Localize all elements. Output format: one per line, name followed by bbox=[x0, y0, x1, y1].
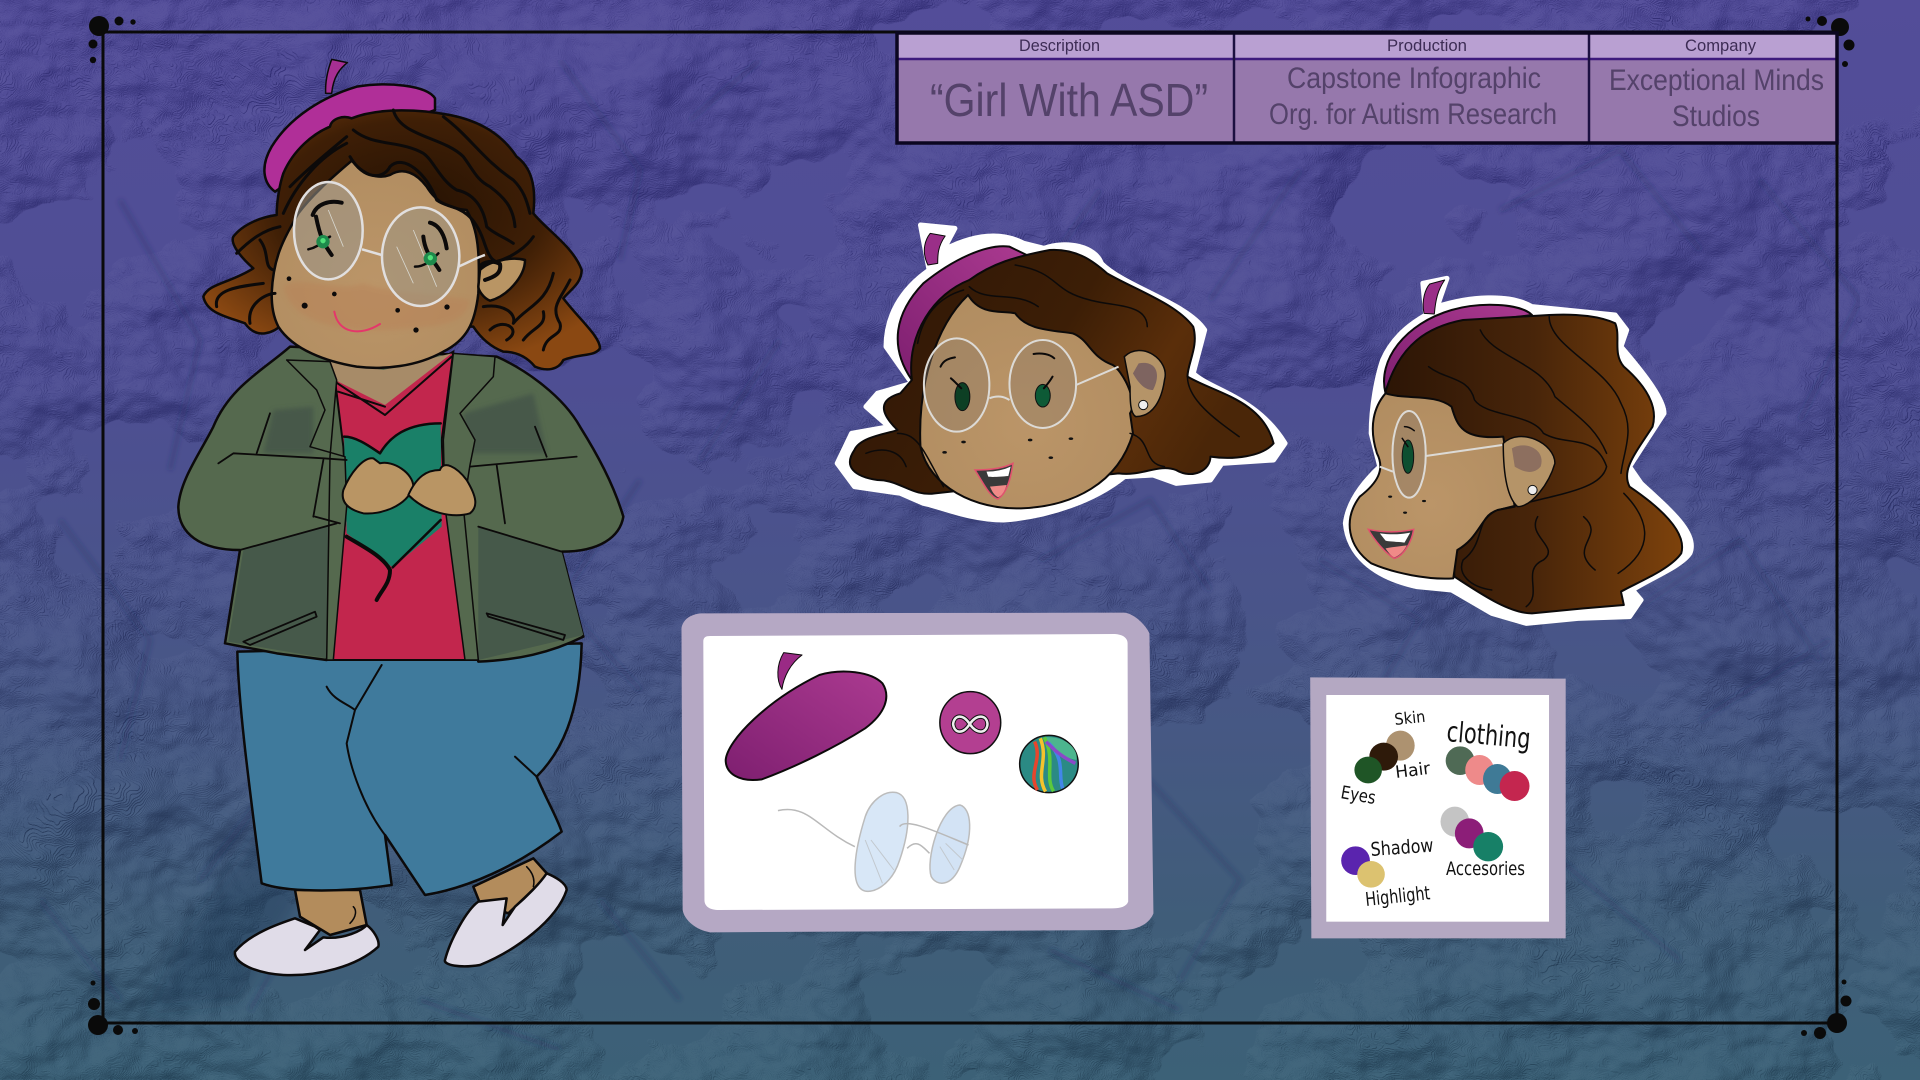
character glasses bbox=[294, 182, 485, 306]
character shirt and heart bbox=[327, 352, 477, 660]
character jacket lines bbox=[218, 353, 577, 660]
beret bbox=[1384, 280, 1532, 393]
face bbox=[1350, 393, 1515, 579]
palette handwritten labels: Eyes bbox=[1339, 782, 1377, 809]
palette handwritten labels bbox=[1339, 707, 1532, 911]
eye bbox=[1402, 427, 1414, 473]
eyes bbox=[941, 354, 1054, 411]
sticker outline bbox=[837, 225, 1285, 520]
ear bbox=[1503, 437, 1555, 507]
production value: Capstone Infographic bbox=[1287, 62, 1541, 95]
hair strands bbox=[866, 265, 1239, 487]
shadow highlight swatches bbox=[1341, 846, 1385, 888]
panel: accessories bbox=[681, 613, 1153, 932]
icon: rainbow pin bbox=[1020, 735, 1078, 793]
production value: Org. for Autism Research bbox=[1269, 98, 1557, 131]
character beret bbox=[264, 59, 435, 192]
info table bbox=[897, 33, 1837, 143]
table header: production: Production bbox=[1387, 36, 1467, 55]
company value bbox=[1609, 64, 1824, 133]
table header: description: Description bbox=[1019, 36, 1100, 55]
hair bbox=[850, 250, 1274, 494]
front-view head sticker bbox=[837, 225, 1285, 520]
character hair bbox=[203, 110, 600, 369]
icon: infinity pin bbox=[940, 692, 1001, 754]
company value: Exceptional Minds bbox=[1609, 64, 1824, 97]
character ear bbox=[478, 259, 525, 301]
character smile bbox=[334, 312, 380, 331]
palette frame bbox=[1310, 677, 1566, 938]
palette handwritten labels: Hair bbox=[1394, 759, 1431, 783]
freckles bbox=[942, 437, 1073, 459]
panel frame bbox=[681, 613, 1153, 932]
palette handwritten labels: Accesories bbox=[1446, 858, 1525, 880]
profile-view head sticker bbox=[1345, 278, 1691, 623]
character freckles bbox=[287, 276, 450, 333]
character hands bbox=[343, 458, 475, 515]
accessories swatches bbox=[1441, 807, 1503, 861]
mouth bbox=[1368, 529, 1414, 558]
glasses bbox=[1380, 411, 1502, 498]
beret bbox=[898, 233, 1027, 380]
panel: colour palette bbox=[1310, 677, 1566, 938]
face bbox=[920, 295, 1133, 508]
hair strands bbox=[1429, 317, 1645, 607]
character face bbox=[216, 110, 570, 368]
clothing swatches bbox=[1446, 746, 1530, 801]
glasses bbox=[924, 338, 1119, 432]
palette handwritten labels: Shadow bbox=[1370, 835, 1434, 861]
panel white sheet bbox=[703, 634, 1128, 910]
ear bbox=[1124, 350, 1165, 417]
freckles bbox=[1388, 495, 1426, 514]
skin hair eyes swatches bbox=[1354, 731, 1415, 783]
sticker outline bbox=[1345, 278, 1691, 623]
full-body character bbox=[178, 59, 623, 975]
character eyes bbox=[308, 202, 447, 270]
character legs and shoes bbox=[235, 643, 582, 975]
palette handwritten labels: Skin bbox=[1393, 707, 1426, 729]
palette handwritten labels: clothing bbox=[1445, 715, 1532, 755]
mouth bbox=[975, 463, 1013, 499]
palette white sheet bbox=[1326, 695, 1549, 922]
palette handwritten labels: Highlight bbox=[1364, 882, 1431, 911]
company value: Studios bbox=[1672, 100, 1760, 133]
icon: beret bbox=[726, 653, 886, 780]
hair bbox=[1386, 315, 1682, 613]
table header: company: Company bbox=[1685, 36, 1756, 55]
character jacket bbox=[178, 347, 623, 662]
icon: glasses bbox=[778, 792, 970, 891]
production value bbox=[1269, 62, 1557, 131]
description value: “Girl With ASD” bbox=[930, 74, 1208, 126]
